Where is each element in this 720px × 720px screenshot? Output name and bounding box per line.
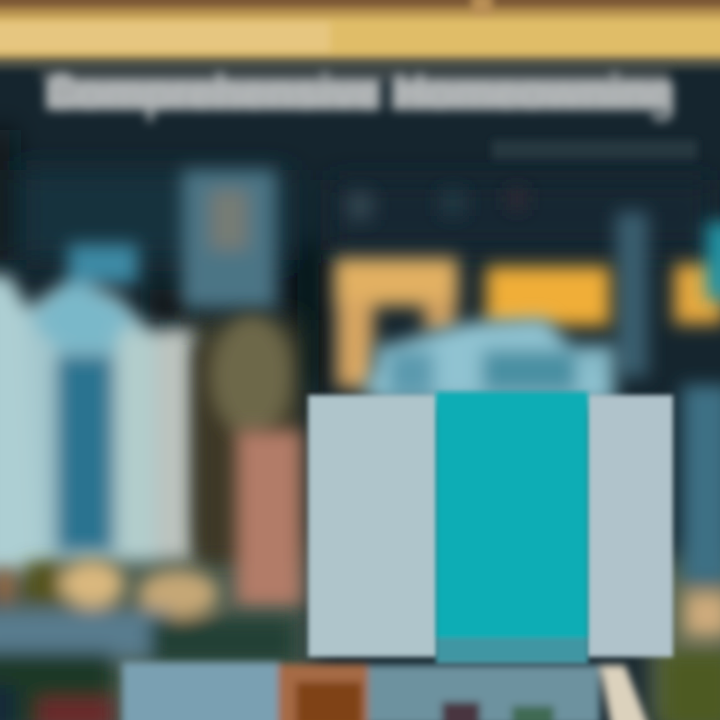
subheading xyxy=(492,140,697,160)
distant tower xyxy=(182,170,648,377)
tree xyxy=(196,315,292,560)
main building: pale left wing xyxy=(308,395,438,657)
left apartment building xyxy=(0,244,194,572)
main building: pale right wing xyxy=(586,395,673,657)
plaza and foreground xyxy=(122,662,650,720)
right building xyxy=(662,222,720,720)
brick column xyxy=(236,430,302,606)
golden windows xyxy=(334,258,720,388)
golden shrubs and street xyxy=(0,560,295,720)
top banner xyxy=(0,0,720,68)
rooftop of main building xyxy=(360,318,615,405)
background dark buildings xyxy=(0,130,710,390)
main building: teal facade xyxy=(436,392,588,664)
ground haze behind the street xyxy=(0,320,720,720)
